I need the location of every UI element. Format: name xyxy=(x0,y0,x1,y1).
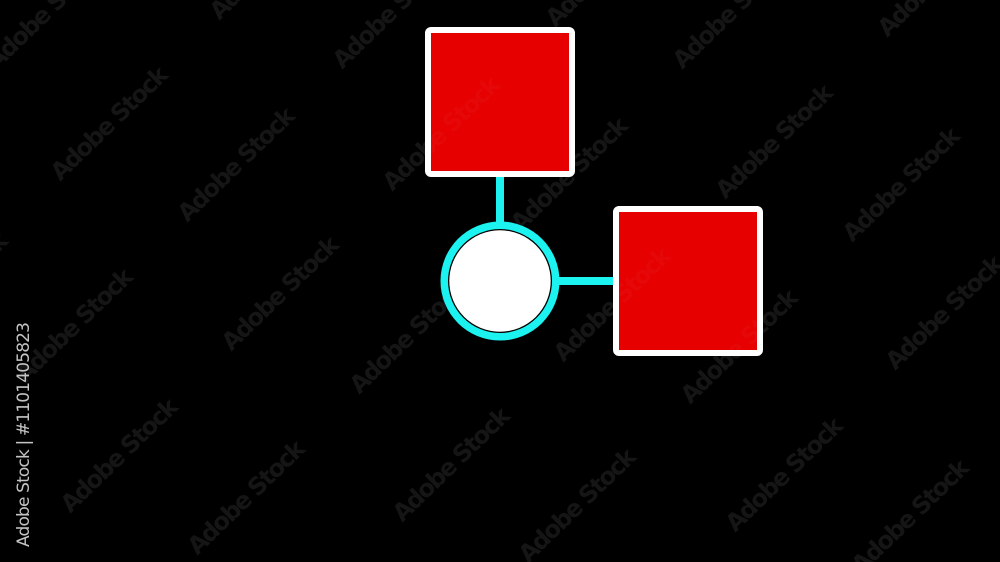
faint watermark over red squares: Adobe Stock xyxy=(377,70,506,196)
stock ID side text: Adobe Stock | #1101405823 xyxy=(14,322,34,547)
watermark pattern: Adobe Stock xyxy=(837,121,966,247)
watermark pattern: Adobe Stock xyxy=(675,283,804,409)
connector: circle to top square xyxy=(496,175,504,225)
faint watermark over red squares: Adobe Stock xyxy=(548,241,677,367)
faint watermark over red squares: Adobe Stock xyxy=(505,111,634,237)
watermark pattern: Adobe Stock xyxy=(182,434,311,560)
faint watermark over red squares xyxy=(377,70,804,409)
watermark pattern: Adobe Stock xyxy=(344,273,473,399)
watermark pattern: Adobe Stock xyxy=(505,111,634,237)
watermark pattern: Adobe Stock xyxy=(45,60,174,186)
watermark pattern: Adobe Stock xyxy=(172,101,301,227)
watermark pattern: Adobe Stock xyxy=(216,230,345,356)
central circle node xyxy=(440,222,560,340)
watermark pattern: Adobe Stock xyxy=(720,411,849,537)
watermark pattern: Adobe Stock xyxy=(10,262,139,388)
watermark pattern: Adobe Stock xyxy=(387,401,516,527)
watermark pattern: Adobe Stock xyxy=(548,241,677,367)
watermark pattern: Adobe Stock xyxy=(55,392,184,518)
watermark pattern: Adobe Stock xyxy=(710,78,839,204)
connector: circle to right square xyxy=(555,277,615,285)
top red square xyxy=(428,30,572,174)
faint watermark over red squares: Adobe Stock xyxy=(675,283,804,409)
right red square xyxy=(616,209,760,353)
watermark pattern: Adobe Stock xyxy=(377,70,506,196)
